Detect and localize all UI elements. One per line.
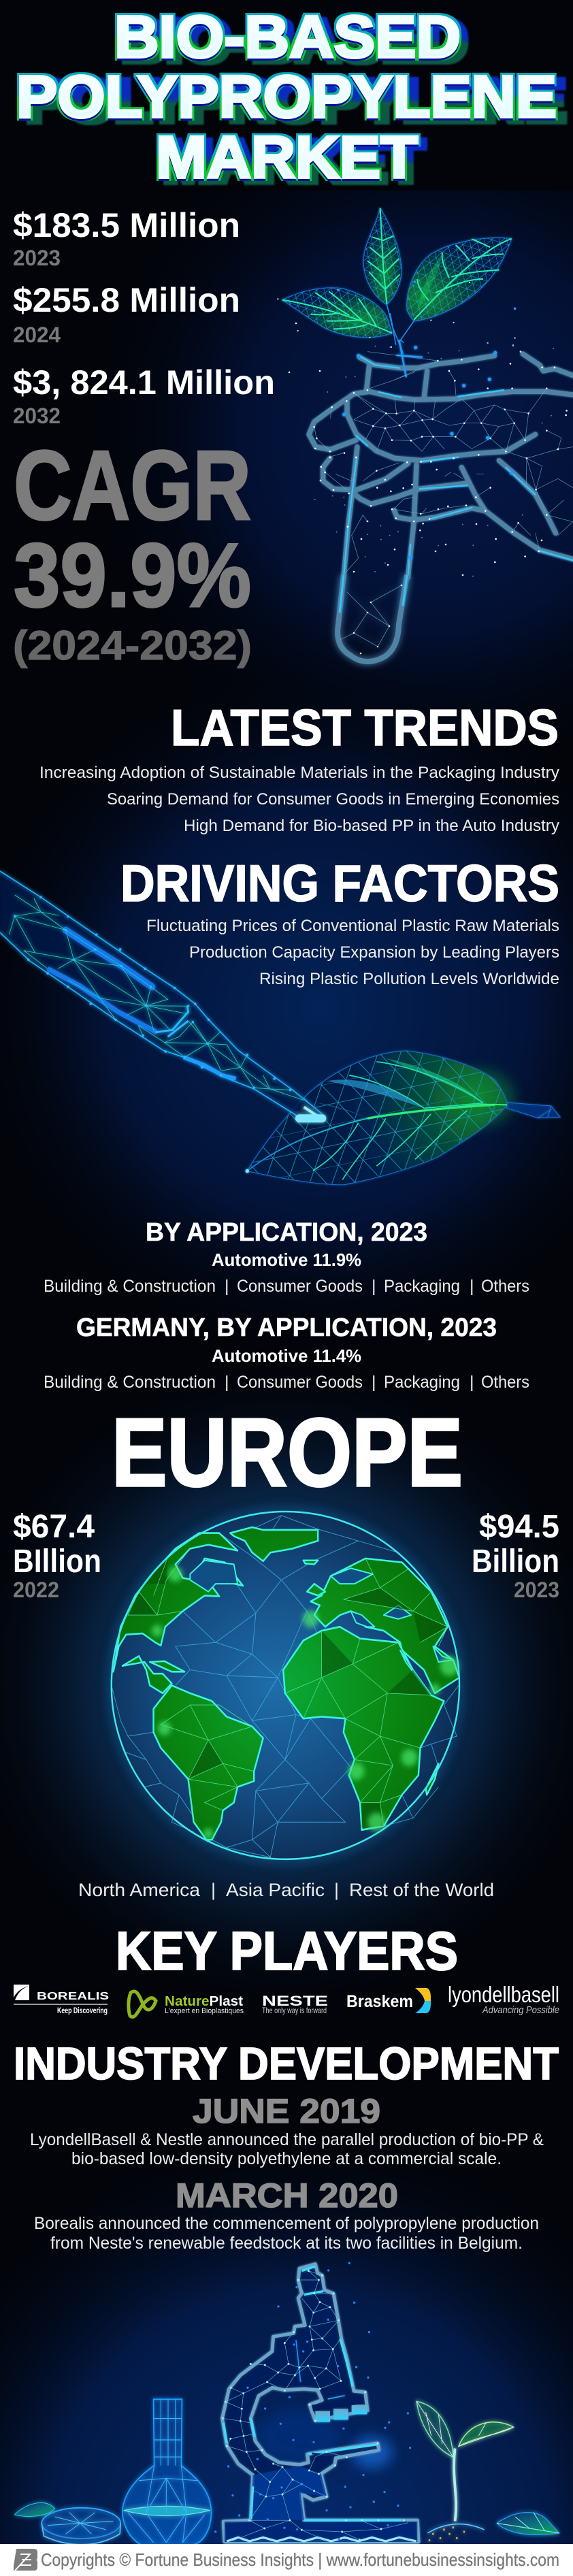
segments list: Packaging [384,1373,460,1392]
trends list: High Demand for Bio-based PP in the Auto Industry [184,817,560,835]
segments list: Building & Construction [44,1277,216,1296]
illustration: laboratory scene [14,2263,559,2545]
europe 2023 value: 2023 [514,1578,559,1602]
left leaf [282,288,392,338]
icon: hand and test tube [309,340,573,577]
right leaf [407,238,512,321]
development: june 2019: LyondellBasell & Nestle announced the parallel production of bio-PP & [30,2130,544,2149]
segments list: | [470,1277,474,1296]
globe ocean [112,1512,459,1859]
segments list: | [225,1373,229,1392]
panel: industry development [14,2038,559,2253]
panel: germany by application 2023 [44,1314,529,1392]
panel: latest trends [39,699,560,835]
development: june 2019: JUNE 2019 [193,2092,380,2130]
heading: BY APPLICATION, 2023 [146,1218,427,1247]
factors list: Rising Plastic Pollution Levels Worldwide [259,970,559,988]
development: june 2019 [30,2092,544,2168]
segments list: | [372,1373,376,1392]
other regions: | [211,1880,216,1900]
segments list [44,1277,529,1296]
segments list [44,1373,529,1392]
segments list: Consumer Goods [237,1373,363,1392]
title: MARKET [156,125,418,191]
europe 2022 value: BIllion [13,1544,101,1580]
panel: by application 2023 [44,1218,529,1296]
illustration: dropper and leaf [0,871,560,1185]
development: march 2020 [34,2176,539,2253]
market size figures: 2032 [13,404,61,428]
logo: neste [262,1993,328,2015]
logo: borealis: Keep Discovering [57,2006,108,2015]
logo: lyondellbasell [448,1982,559,2016]
heading: GERMANY, BY APPLICATION, 2023 [76,1314,497,1342]
market size figures [13,206,275,428]
glow spots [152,1566,459,1840]
inland water details [190,1561,453,1693]
market size figures: $3, 824.1 Million [13,363,275,402]
segments list: Building & Construction [44,1373,216,1392]
other regions [78,1880,494,1900]
title: BIO-BASED [114,4,461,70]
market size figures: 2024 [13,323,61,347]
trends list [39,764,560,835]
flask, dish, seedling group [14,2399,559,2545]
segments list: Consumer Goods [237,1277,363,1296]
continents [113,1527,459,1840]
logo: braskem: Braskem [346,1992,413,2011]
highlighted segment: Automotive 11.4% [212,1346,361,1366]
footer [0,2544,573,2576]
factors list [146,917,559,988]
heading: europe: EUROPE [112,1399,463,1507]
development: june 2019: bio-based low-density polyethylene at a commercial scale. [71,2149,502,2168]
title [16,4,557,191]
factors list: Fluctuating Prices of Conventional Plastic Raw Materials [146,917,559,935]
europe 2023 value [472,1509,559,1602]
logo: borealis: BOREALIS [37,1991,109,2002]
europe 2022 value [13,1509,101,1602]
development: march 2020: MARCH 2020 [176,2176,398,2215]
segments list: | [372,1277,376,1296]
europe 2022 value: $67.4 [13,1509,95,1545]
other regions: Rest of the World [349,1880,494,1900]
trends list: Increasing Adoption of Sustainable Materials in the Packaging Industry [39,764,560,782]
rim [112,1512,459,1859]
other regions: Asia Pacific [226,1880,325,1900]
europe 2023 value: Billion [472,1544,559,1580]
CAGR callout: (2024-2032) [13,623,252,668]
top leaf [363,208,402,304]
development: march 2020: from Neste's renewable feedstock at its two facilities in Belgium. [50,2234,523,2253]
land mesh [128,1549,448,1826]
icon: leaf [247,1051,560,1185]
logo: natureplast: NaturePlast [165,1994,243,2009]
globe glow [106,1505,465,1865]
segments list: Others [481,1373,529,1392]
factors list: Production Capacity Expansion by Leading Players [189,943,559,962]
CAGR callout: CAGR [14,430,251,540]
dark land facets [128,1556,448,1828]
illustration: globe [106,1505,465,1865]
heading: key players: KEY PLAYERS [116,1921,458,1981]
logo: borealis [14,1985,109,2015]
segments list: Others [481,1277,529,1296]
europe 2023 value: $94.5 [479,1509,559,1545]
market size figures: 2023 [13,246,61,270]
icon: sprout leaves [278,208,515,354]
logo: braskem [346,1988,431,2013]
icon: seedling [416,2401,513,2541]
icon: petri dish with leaf [14,2502,120,2545]
logo: neste: NESTE [262,1993,328,2009]
logo: natureplast [129,1991,244,2017]
CAGR callout: 39.9% [14,525,251,626]
CAGR callout [13,430,252,668]
stem [387,304,414,354]
segments list: Packaging [384,1277,460,1296]
illustration: hand holding test tube with plant [278,208,573,662]
icon: test tube lower body [338,575,407,662]
panel: driving factors [120,855,559,988]
icon: dropper [0,871,322,1121]
icon: fortune business insights logo [14,2549,37,2571]
development: march 2020: Borealis announced the commencement of polypropylene production [34,2214,539,2233]
segments list: | [225,1277,229,1296]
trends list: Soaring Demand for Consumer Goods in Emerging Economies [107,790,559,809]
title: POLYPROPYLENE [16,64,557,130]
icon: microscope [216,2263,419,2542]
market size figures: $183.5 Million [13,206,240,244]
icon: fallen leaf [497,2513,559,2534]
segments list: | [470,1373,474,1392]
other regions: North America [78,1880,201,1900]
logo: natureplast: L'expert en Bioplastiques [165,2007,244,2015]
ocean mesh [112,1516,459,1857]
other regions: | [334,1880,339,1900]
europe 2022 value: 2022 [13,1578,59,1602]
key player logos [14,1982,559,2017]
market size figures: $255.8 Million [13,281,240,319]
icon: round flask [122,2399,211,2545]
logo: neste: The only way is forward [262,2006,327,2015]
highlighted segment: Automotive 11.9% [212,1250,361,1270]
logo: lyondellbasell: Advancing Possible [482,2004,559,2016]
